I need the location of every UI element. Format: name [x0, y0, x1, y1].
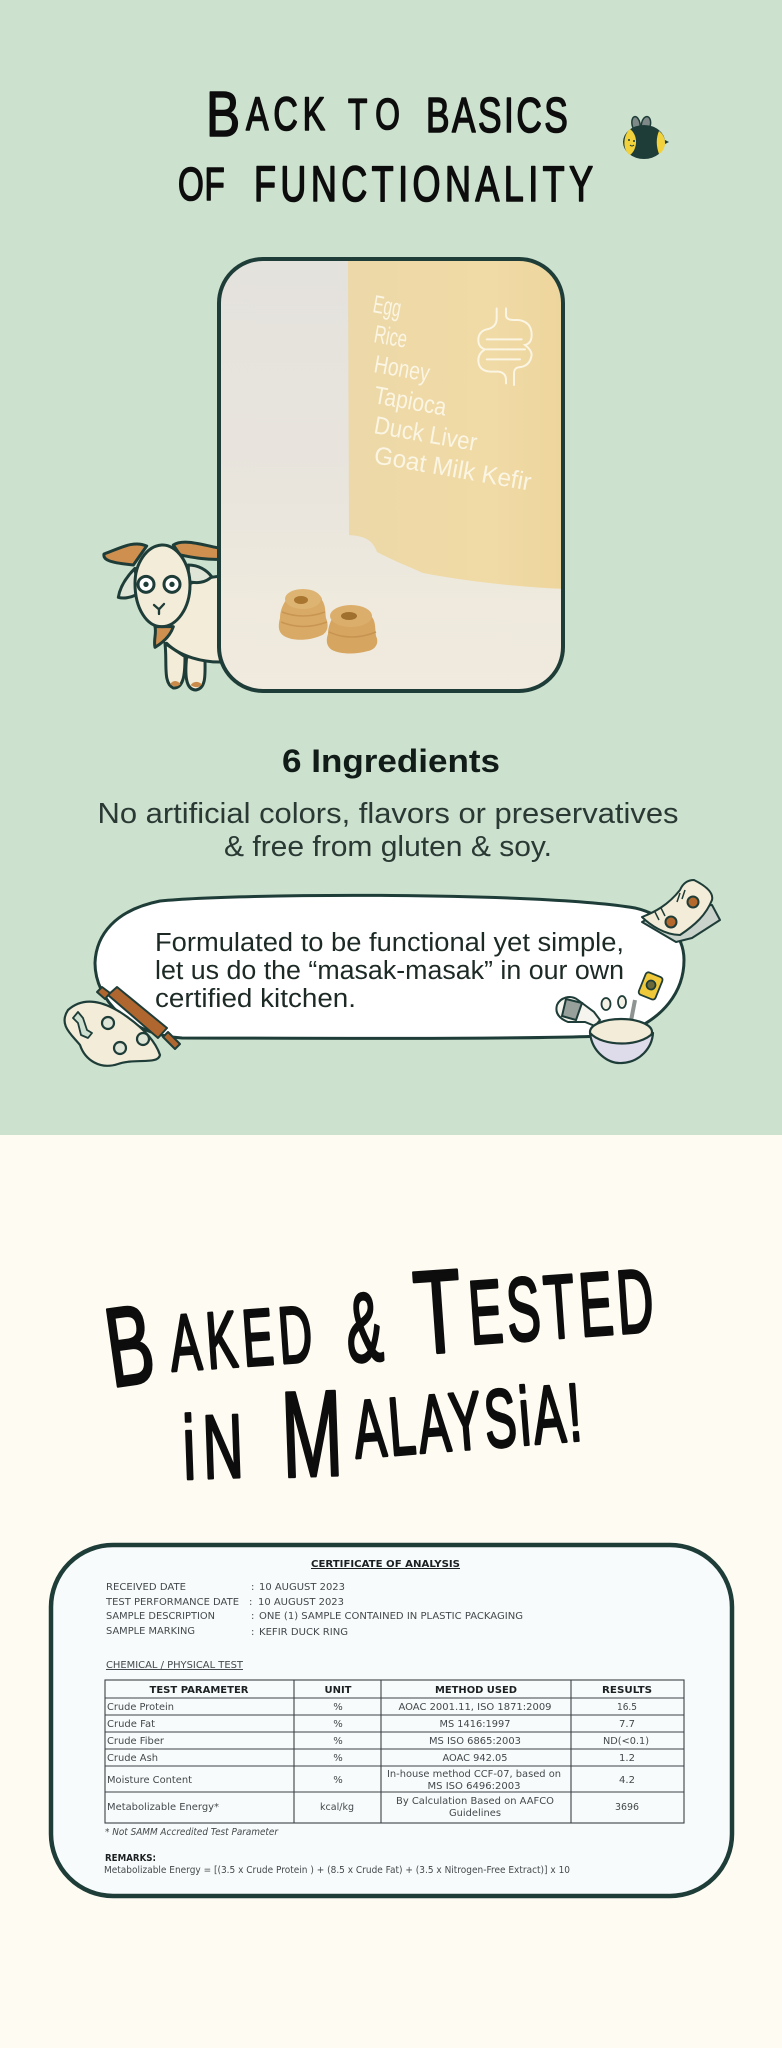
- results table: Guidelines: [449, 1808, 501, 1819]
- results table: MS 1416:1997: [440, 1719, 510, 1730]
- icon: recipe book: [642, 880, 720, 942]
- results table: Crude Fat: [107, 1719, 155, 1730]
- results table: 16.5: [617, 1702, 637, 1713]
- results table: By Calculation Based on AAFCO: [396, 1796, 554, 1807]
- remarks: REMARKS:: [105, 1853, 156, 1864]
- sample details: SAMPLE MARKING: [106, 1626, 195, 1637]
- results table: %: [333, 1775, 343, 1786]
- results table: MS ISO 6865:2003: [429, 1736, 521, 1747]
- title: back to basics of functionality: [178, 80, 593, 212]
- results table: 7.7: [619, 1719, 635, 1730]
- sample details: TEST PERFORMANCE DATE: [105, 1597, 239, 1608]
- text block: no artificial colors: & free from gluten & soy.: [224, 831, 552, 863]
- results table: MS ISO 6496:2003: [428, 1781, 520, 1792]
- results table: 4.2: [619, 1775, 635, 1786]
- callout text: let us do the “masak-masak” in our own: [155, 957, 624, 985]
- icon: bee: [623, 116, 669, 159]
- printed ingredient list on pouch: Rice: [372, 320, 409, 354]
- results table: AOAC 2001.11, ISO 1871:2009: [398, 1702, 552, 1713]
- title: baked and tested in malaysia: M: [279, 1366, 345, 1504]
- panel: green section background: [0, 0, 782, 1135]
- callout text: certified kitchen.: [155, 985, 356, 1013]
- title: baked and tested in malaysia: ALAYSiA!: [350, 1367, 585, 1476]
- icon: milk bottle: [556, 997, 600, 1026]
- results table: %: [333, 1702, 343, 1713]
- results table: kcal/kg: [320, 1802, 354, 1813]
- results table: [105, 1680, 684, 1823]
- printed ingredient list on pouch: Duck Liver: [372, 411, 479, 457]
- title: back to basics of functionality: TO: [348, 90, 400, 139]
- sample details: :: [251, 1611, 254, 1622]
- heading: 6 ingredients: 6 Ingredients: [282, 743, 500, 779]
- results table: UNIT: [324, 1685, 352, 1696]
- title: baked and tested in malaysia: B: [98, 1281, 161, 1411]
- text block: no artificial colors: No artificial colors, flavors or preservatives: [98, 798, 678, 830]
- sample details: KEFIR DUCK RING: [259, 1627, 348, 1638]
- results table: Crude Fiber: [107, 1736, 165, 1747]
- results table: Crude Ash: [107, 1753, 158, 1764]
- results table: %: [333, 1736, 343, 1747]
- icon: yellow butter packet: [638, 971, 663, 1000]
- title: baked and tested in malaysia: ESTED: [465, 1251, 657, 1364]
- sample details: :: [251, 1627, 254, 1638]
- title: baked and tested in malaysia: &: [343, 1271, 386, 1383]
- photo: wall and floor: [217, 257, 565, 693]
- results table: AOAC 942.05: [442, 1753, 508, 1764]
- title: baked and tested in malaysia: iN: [181, 1395, 245, 1498]
- panel: cream section background: [0, 1135, 782, 2048]
- title: baked and tested in malaysia: [98, 1245, 657, 1504]
- printed ingredient list on pouch: Goat Milk Kefir: [372, 441, 533, 497]
- icon: goat peeking from behind photo: [104, 542, 223, 690]
- results table: In-house method CCF-07, based on: [387, 1769, 561, 1780]
- icon: intestine line art: [478, 308, 532, 385]
- icon: rolling pin: [97, 987, 180, 1049]
- icon: mixing bowl: [590, 1000, 653, 1063]
- callout text: Formulated to be functional yet simple,: [155, 929, 624, 957]
- results table: Metabolizable Energy*: [107, 1802, 219, 1813]
- icon: egg shells: [602, 996, 626, 1010]
- panel: product photo frame: [217, 257, 565, 693]
- results table: Crude Protein: [107, 1702, 174, 1713]
- callout text: [155, 929, 624, 1013]
- results table: %: [333, 1719, 343, 1730]
- sample details: RECEIVED DATE: [106, 1582, 186, 1593]
- sample details: 10 AUGUST 2023: [259, 1582, 345, 1593]
- icon: dough with bone cutouts: [65, 1002, 160, 1066]
- sample details: :: [251, 1582, 254, 1593]
- footnote: * Not SAMM Accredited Test Parameter: [105, 1827, 279, 1838]
- results table: METHOD USED: [435, 1685, 517, 1696]
- callout: speech bubble: [95, 895, 684, 1038]
- results table: TEST PARAMETER: [150, 1685, 249, 1696]
- results table: Moisture Content: [107, 1775, 192, 1786]
- table heading: CHEMICAL / PHYSICAL TEST: [106, 1660, 244, 1671]
- sample details: ONE (1) SAMPLE CONTAINED IN PLASTIC PACKAGING: [259, 1611, 523, 1622]
- title: baked and tested in malaysia: AKED: [167, 1289, 315, 1388]
- remarks: Metabolizable Energy = [(3.5 x Crude Protein ) + (8.5 x Crude Fat) + (3.5 x Nitrogen-Free Extract)] x 10: [104, 1865, 570, 1876]
- title: baked and tested in malaysia: T: [410, 1245, 466, 1380]
- title: back to basics of functionality: B: [206, 80, 240, 150]
- sample details: SAMPLE DESCRIPTION: [106, 1611, 215, 1622]
- printed ingredient list on pouch: Honey: [372, 350, 432, 388]
- title: back to basics of functionality: ACK: [246, 88, 325, 140]
- title: back to basics of functionality: OF: [178, 160, 225, 210]
- results table: %: [333, 1753, 343, 1764]
- printed ingredient list on pouch: Tapioca: [372, 381, 449, 422]
- results table: ND(<0.1): [603, 1736, 649, 1747]
- kefir duck ring treats: [279, 589, 377, 654]
- title: back to basics of functionality: FUNCTIONALITY: [254, 157, 593, 212]
- sample details: [105, 1582, 523, 1638]
- results table: 3696: [615, 1802, 639, 1813]
- results table: 1.2: [619, 1753, 635, 1764]
- sample details: 10 AUGUST 2023: [258, 1597, 344, 1608]
- panel: certificate of analysis: [51, 1545, 732, 1896]
- title: back to basics of functionality: BASICS: [426, 88, 568, 143]
- printed ingredient list on pouch: Egg: [371, 290, 403, 323]
- sample details: :: [249, 1597, 252, 1608]
- certificate title: CERTIFICATE OF ANALYSIS: [311, 1559, 460, 1570]
- remarks: [104, 1853, 570, 1876]
- printed ingredient list on pouch: [371, 290, 533, 497]
- text block: no artificial colors: [98, 798, 678, 863]
- results table: RESULTS: [602, 1685, 652, 1696]
